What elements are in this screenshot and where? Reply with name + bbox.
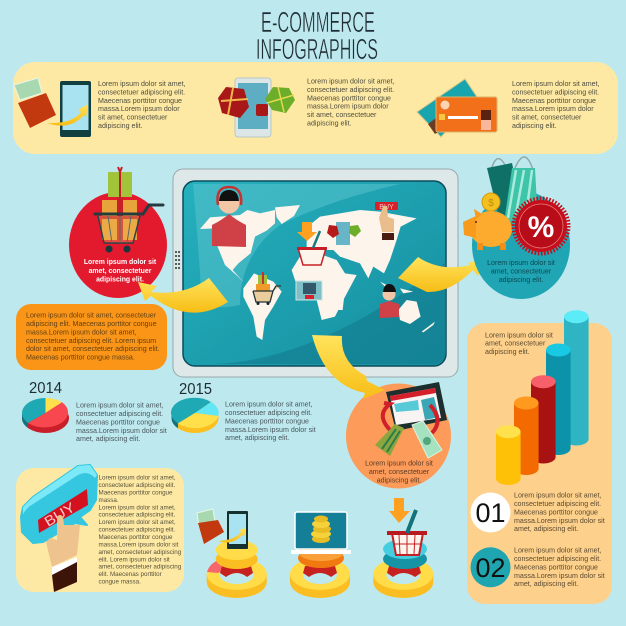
- icon: piggy bank: [463, 193, 512, 250]
- icon: support agent america: [212, 187, 246, 247]
- text: 2015 description: Maecenas porttitor congue: [225, 417, 309, 425]
- text: red circle caption: Lorem ipsum dolor sit: [84, 259, 157, 266]
- icon: percent badge: [514, 198, 568, 254]
- text: buy panel description: Lorem ipsum dolor sit amet,: [98, 474, 176, 482]
- text: feature two: massa.Lorem ipsum dolor: [307, 103, 389, 111]
- text: feature two: adipiscing elit.: [307, 120, 352, 128]
- text: 2014 description: amet, adipiscing elit.: [76, 435, 140, 443]
- text: feature two: Maecenas porttitor congue: [307, 94, 391, 102]
- badge: 02: [470, 547, 510, 587]
- text: buy panel description: elit. Lorem ipsum dolor sit: [98, 556, 170, 563]
- icon: laptop ad africa: [296, 281, 322, 300]
- icon: basket europe: [297, 222, 327, 265]
- text: chart description: Lorem ipsum dolor sit: [485, 332, 553, 340]
- icon: wallet and phone: [14, 78, 91, 137]
- text: buy panel description: massa.Lorem ipsum dolor sit: [98, 541, 179, 548]
- text: item 02: consectetuer adipiscing elit.: [514, 555, 601, 563]
- icon: phone with gifts: [218, 78, 295, 137]
- panel: buy button: [16, 465, 184, 592]
- text: teal circle caption: amet, consectetuer: [491, 268, 552, 276]
- text: 2015 description: massa.Lorem ipsum dolor sit: [225, 426, 316, 434]
- text: feature two: consectetuer adipiscing elit.: [307, 86, 394, 94]
- text: chart description: adipiscing elit.: [485, 348, 530, 356]
- text: teal circle caption: Lorem ipsum dolor sit: [487, 259, 555, 267]
- text: item 01: Lorem ipsum dolor sit amet,: [514, 492, 602, 500]
- text: 2015 description: consectetuer adipiscing elit.: [225, 409, 312, 417]
- text: feature three: Lorem ipsum dolor sit amet,: [512, 80, 600, 88]
- panel: orange text: adipiscing elit. Maecenas porttitor congue: [26, 320, 157, 328]
- icon: support agent australia: [380, 284, 399, 318]
- icon: shopping cart south america: [253, 272, 281, 305]
- text: item 02: Lorem ipsum dolor sit amet,: [514, 546, 602, 554]
- text: item 02: Maecenas porttitor congue: [514, 563, 598, 571]
- icon: gifts on phone: [327, 222, 361, 245]
- text: item 01: amet, adipiscing elit.: [514, 525, 578, 533]
- text: buy panel description: Lorem ipsum dolor sit amet,: [98, 519, 176, 526]
- icon: buy speech bubble with hand: [21, 465, 97, 592]
- text: item 02: amet, adipiscing elit.: [514, 580, 578, 588]
- text: feature three: consectetuer adipiscing elit.: [512, 88, 599, 96]
- text: feature two: Lorem ipsum dolor sit amet,: [307, 78, 395, 86]
- text: feature one: consectetuer adipiscing elit.: [98, 88, 185, 96]
- arrow: to payment circle: [312, 335, 385, 399]
- text: 2015 description: Lorem ipsum dolor sit amet,: [225, 400, 313, 408]
- text: feature one: Lorem ipsum dolor sit amet,: [98, 80, 186, 88]
- text: 2015 description: amet, adipiscing elit.: [225, 434, 289, 442]
- badge: 02: 02: [475, 553, 506, 583]
- text: feature three: Maecenas porttitor congue: [512, 97, 596, 105]
- panel: savings drop circle: [463, 157, 570, 299]
- pedestal: basket with arrow: [373, 498, 433, 598]
- icon: buy hand: BUY: [379, 204, 394, 211]
- icon: buy speech bubble with hand: BUY: [41, 498, 78, 530]
- text: buy panel description: amet, consectetuer adipiscing: [98, 564, 182, 571]
- panel: orange text: Maecenas porttitor congue massa.: [26, 354, 135, 362]
- text: orange circle caption: amet, consectetuer: [369, 468, 430, 476]
- text: 2014 description: Lorem ipsum dolor sit amet,: [76, 402, 164, 410]
- panel: orange text: dolor sit amet, consectetuer adipiscing elit.: [26, 345, 160, 353]
- title: INFOGRAPHICS: [256, 34, 378, 66]
- text: item 01: massa.Lorem ipsum dolor sit: [514, 517, 605, 525]
- text: red circle caption: amet, consectetuer: [89, 268, 152, 275]
- text: buy panel description: massa.: [98, 497, 119, 504]
- year label 2014: 2014: [29, 380, 62, 397]
- text: buy panel description: amet, consectetuer adipiscing: [98, 549, 182, 556]
- text: feature three: sit amet, consectetuer: [512, 114, 582, 122]
- panel: top features: [13, 62, 618, 154]
- text: feature three: adipiscing elit.: [512, 122, 557, 130]
- icon: percent badge: %: [528, 211, 554, 244]
- text: item 01: Maecenas porttitor congue: [514, 508, 598, 516]
- text: buy panel description: Lorem ipsum dolor sit amet,: [98, 504, 176, 511]
- text: item 02: massa.Lorem ipsum dolor sit: [514, 572, 605, 580]
- icon: piggy bank: $: [488, 198, 494, 209]
- title: [256, 7, 378, 66]
- icon: shopping bag: [487, 157, 537, 222]
- title: E-COMMERCE: [261, 7, 375, 39]
- text: teal circle caption: adipiscing elit.: [499, 276, 543, 284]
- text: 2014 description: consectetuer adipiscing elit.: [76, 410, 163, 418]
- text: feature two: sit amet, consectetuer: [307, 111, 377, 119]
- icon: payment tablet: [375, 382, 447, 458]
- cylinder chart: [496, 310, 589, 485]
- text: buy panel description: Maecenas porttitor congue: [98, 534, 173, 541]
- text: buy panel description: consectetuer adipiscing elit.: [98, 512, 176, 519]
- icon: credit cards: [417, 79, 497, 137]
- text: 2014 description: massa.Lorem ipsum dolor sit: [76, 427, 167, 435]
- text: buy panel description: congue massa.: [98, 579, 141, 586]
- text: chart description: amet, consectetuer: [485, 340, 546, 348]
- panel: orange text: [16, 304, 167, 370]
- text: feature one: adipiscing elit.: [98, 122, 143, 130]
- text: buy panel description: Maecenas porttitor congue: [98, 489, 173, 496]
- arrow: to piggy circle: [398, 257, 487, 292]
- text: feature one: sit amet, consectetuer: [98, 114, 168, 122]
- text: buy panel description: consectetuer adipiscing elit.: [98, 527, 176, 534]
- icon: buy hand: [375, 202, 398, 240]
- pie chart 2015: [171, 398, 219, 433]
- panel: tablet world map: [173, 169, 458, 377]
- panel: orange text: Lorem ipsum dolor sit amet, consectetuer: [26, 312, 157, 320]
- world map: [200, 205, 435, 340]
- panel: bar chart and list: [467, 310, 612, 604]
- text: buy panel description: elit. Maecenas porttitor: [98, 571, 162, 578]
- pedestal: wallet to phone: [197, 509, 267, 598]
- text: buy panel description: consectetuer adipiscing elit.: [98, 482, 176, 489]
- arrow: to red circle: [138, 278, 228, 313]
- text: red circle caption: adipiscing elit.: [96, 276, 144, 284]
- panel: orange text: massa.Lorem ipsum dolor sit amet,: [26, 328, 136, 336]
- text: orange circle caption: adipiscing elit.: [377, 476, 421, 484]
- icon: shopping cart with gifts: [95, 167, 163, 252]
- badge: 01: [470, 492, 510, 532]
- panel: orange payment circle: [346, 382, 451, 488]
- text: 2014 description: Maecenas porttitor congue: [76, 418, 160, 426]
- text: feature one: Maecenas porttitor congue: [98, 97, 182, 105]
- pie chart 2014: [22, 398, 69, 433]
- text: item 01: consectetuer adipiscing elit.: [514, 500, 601, 508]
- text: feature three: massa.Lorem ipsum dolor: [512, 105, 594, 113]
- panel: shopping cart circle: [69, 167, 167, 298]
- panel: orange text: consectetuer adipiscing elit. Lorem ipsum: [26, 337, 156, 345]
- badge: 01: 01: [475, 498, 506, 528]
- year label 2015: 2015: [179, 381, 212, 398]
- text: feature one: massa.Lorem ipsum dolor: [98, 105, 180, 113]
- text: orange circle caption: Lorem ipsum dolor sit: [365, 460, 433, 468]
- pedestal: laptop with coins: [290, 512, 351, 598]
